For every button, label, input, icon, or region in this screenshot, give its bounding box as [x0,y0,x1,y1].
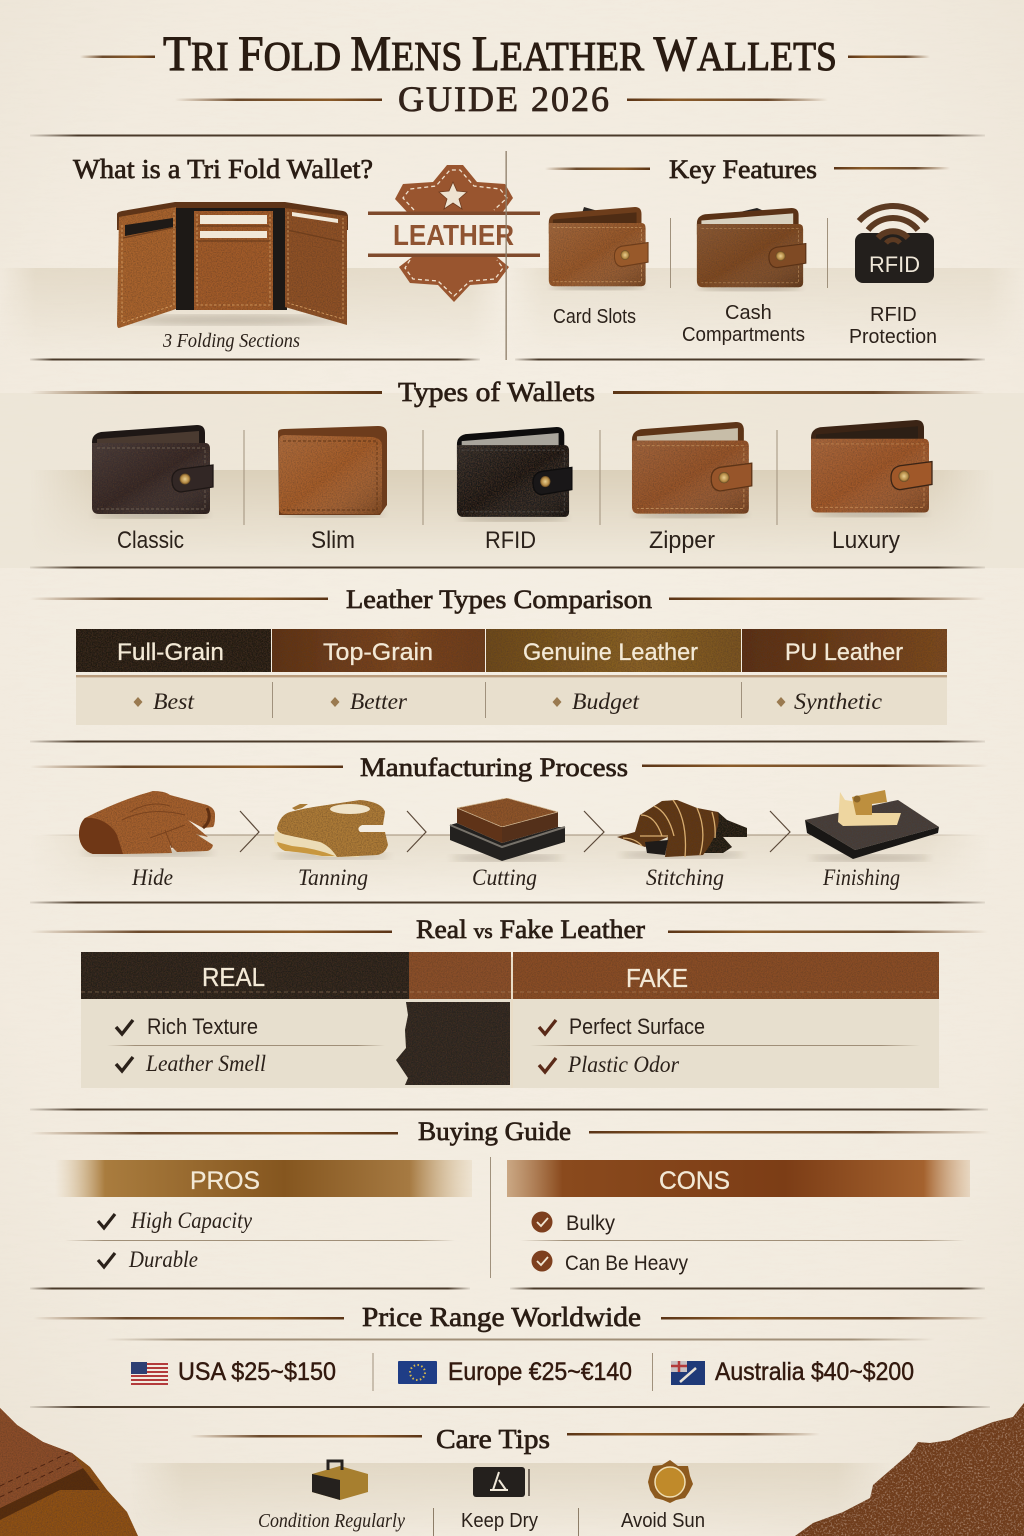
label: condition regularly: Condition Regularly [258,1510,405,1532]
flag: australia [671,1361,705,1385]
header: fake: FAKE [626,963,688,993]
list: fake points: Plastic Odor [567,1052,680,1077]
price: usa: USA $25~$150 [178,1358,336,1386]
pros column [55,1160,472,1272]
heading: leather types comparison: Leather Types Comparison [346,585,652,614]
list: fake points: Perfect Surface [569,1014,705,1039]
label: avoid sun: Avoid Sun [621,1510,705,1532]
caption: 3 folding sections: 3 Folding Sections [162,330,300,352]
label: slim: Slim [311,527,355,554]
flag: europe [398,1361,437,1384]
list: real points: Rich Texture [147,1014,258,1039]
label: cutting: Cutting [472,865,537,890]
arrow [770,811,790,852]
cons column [507,1160,970,1275]
table: comparison [81,952,939,1088]
heading: price range: Price Range Worldwide [362,1302,641,1332]
pros column: High Capacity [130,1208,253,1233]
leather corner: bottom right [795,1403,1024,1536]
icon: rfid card: RFID [869,252,920,277]
illustration: open tri fold wallet [117,202,348,328]
table header: leather grades [76,629,947,672]
label: zipper: Zipper [649,527,715,554]
pros column: Durable [128,1247,198,1272]
panel: what is a tri fold wallet [73,154,373,352]
label: rfid: RFID [485,527,536,554]
badge: leather [368,165,540,302]
heading: key features: Key Features [669,155,817,184]
label: hide: Hide [131,865,173,890]
panel: care tips [130,1424,890,1536]
table row: ratings: Budget [572,689,640,714]
title: TRI FOLD MENS LEATHER WALLETS [163,25,837,81]
label: cash compartments: Cash [725,302,772,324]
heading: real vs fake: Real vs Fake Leather [416,915,645,944]
icon: finishing [805,790,939,861]
heading: buying guide: Buying Guide [418,1117,571,1146]
pros column: PROS [190,1167,260,1195]
cons column: Can Be Heavy [565,1252,688,1275]
table header: leather grades: Full-Grain [117,639,224,666]
wallet: classic [92,425,213,518]
icon: hide [79,791,215,856]
header: real: REAL [202,962,265,992]
icon: keep dry [473,1467,529,1497]
cons column: CONS [659,1167,730,1195]
label: finishing: Finishing [822,865,900,890]
list: fake points [530,1014,920,1077]
heading: what is: What is a Tri Fold Wallet? [73,154,373,184]
arrow [240,811,259,852]
wallet: slim [278,426,387,517]
panel: real vs fake leather [30,915,988,1088]
heading: types of wallets: Types of Wallets [398,377,595,407]
icon: rfid card [855,206,934,283]
price: europe: Europe €25~€140 [448,1358,632,1386]
icon: cutting [450,798,565,861]
table row: ratings: Best [153,689,195,714]
label: rfid protection: RFID [870,304,917,326]
icon: card slots wallet [549,207,648,290]
wallet: rfid [457,427,572,521]
subtitle: GUIDE 2026 [398,79,609,119]
care band [148,1463,872,1515]
cons column: Bulky [566,1212,615,1235]
list: real points: Leather Smell [145,1051,266,1076]
icon: stitching [617,800,747,858]
icon: conditioner box [312,1461,368,1500]
table row: ratings: Better [350,689,408,714]
label: keep dry: Keep Dry [461,1510,538,1532]
badge: leather: LEATHER [393,220,514,252]
label: tanning: Tanning [298,865,368,890]
panel: key features [545,155,950,348]
price: australia: Australia $40~$200 [715,1358,914,1386]
label: luxury: Luxury [832,527,900,554]
label: rfid protection: Protection [849,326,937,348]
icon: tanning [274,800,390,859]
table header: leather grades: Genuine Leather [523,639,698,666]
icon: sun [648,1460,693,1503]
panel: manufacturing process [30,753,988,890]
label: classic: Classic [117,527,184,554]
label: card slots: Card Slots [553,306,636,328]
panel: buying guide [30,1117,990,1278]
list: real points [107,1014,385,1076]
arrow [584,811,604,852]
heading: manufacturing process: Manufacturing Process [360,753,628,782]
table row: ratings [76,678,947,725]
label: stitching: Stitching [646,865,724,890]
leather corner: bottom left [0,1408,138,1536]
panel: leather types comparison [30,585,986,725]
arrow [407,811,426,852]
panel: price range worldwide [33,1302,988,1391]
panel: types of wallets [30,377,985,554]
label: cash compartments: Compartments [682,324,805,346]
heading: care tips: Care Tips [436,1424,550,1454]
wallet: zipper [632,422,752,518]
flag: usa [131,1362,168,1385]
table header: leather grades: Top-Grain [323,639,433,666]
wallet: luxury [811,420,932,517]
table header: leather grades: PU Leather [785,639,903,666]
icon: cash compartments wallet [697,208,806,291]
table row: ratings: Synthetic [794,689,882,714]
